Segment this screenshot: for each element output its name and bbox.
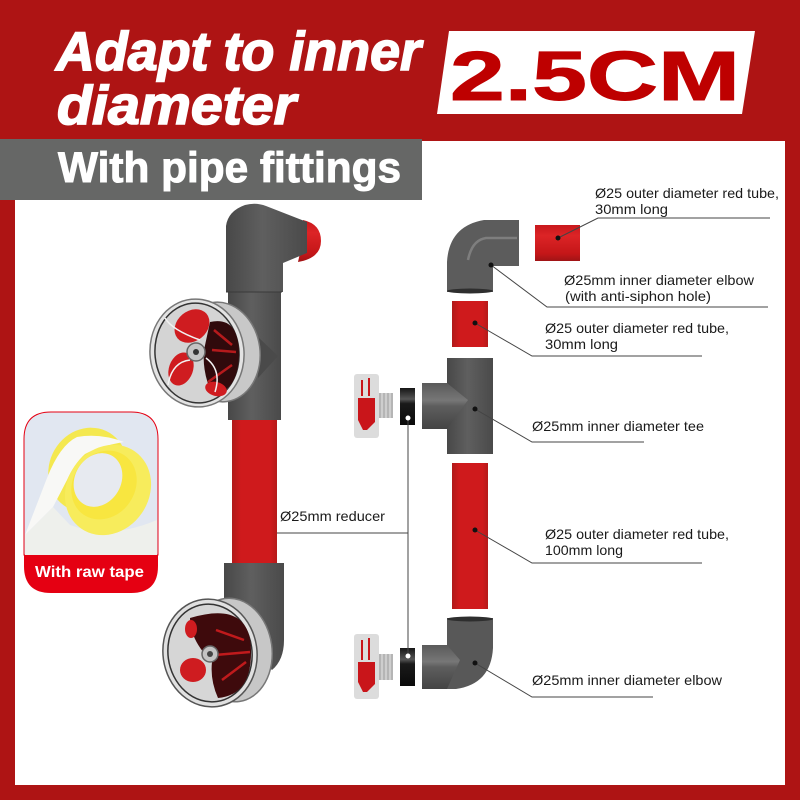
small fan side view top bbox=[354, 374, 393, 438]
exploded bottom elbow bbox=[422, 616, 493, 689]
title: diameter bbox=[57, 74, 299, 136]
label: bottom elbow: Ø25mm inner diameter elbow bbox=[532, 672, 723, 688]
top elbow bbox=[226, 204, 307, 292]
fan hub bbox=[202, 646, 218, 662]
leader: bottom elbow bbox=[472, 660, 653, 697]
fan blades bbox=[168, 302, 216, 350]
top red cap bbox=[298, 220, 321, 262]
tee fitting bbox=[228, 292, 281, 420]
label: top elbow bbox=[564, 272, 755, 304]
label: red tube 100mm bbox=[545, 526, 729, 558]
exploded short red tube horizontal bbox=[535, 225, 580, 261]
label: reducer: Ø25mm reducer bbox=[280, 508, 385, 524]
label: red tube 30mm top: Ø25 outer diameter red tube, bbox=[595, 185, 779, 201]
exploded short red tube vertical bbox=[452, 301, 488, 347]
raw tape card bbox=[24, 412, 169, 593]
tape roll front bbox=[47, 428, 169, 552]
label: red tube 30mm top: 30mm long bbox=[595, 201, 668, 217]
fan hub bbox=[187, 343, 205, 361]
label: red tube 30mm bbox=[545, 320, 729, 352]
leader: tee bbox=[472, 406, 644, 442]
label: red tube 100mm: 100mm long bbox=[545, 542, 623, 558]
title bbox=[54, 20, 424, 136]
tape label bbox=[24, 555, 158, 593]
label: tee: Ø25mm inner diameter tee bbox=[532, 418, 704, 434]
white content panel bbox=[15, 141, 785, 785]
small fan side view bottom bbox=[354, 634, 393, 699]
reducer bottom bbox=[400, 648, 415, 686]
tape strip bbox=[25, 436, 124, 535]
reducer top bbox=[400, 388, 415, 425]
label: top elbow: (with anti-siphon hole) bbox=[565, 288, 711, 304]
label: red tube 100mm: Ø25 outer diameter red tube, bbox=[545, 526, 729, 542]
long red tube bbox=[232, 420, 277, 564]
leader: reducer bbox=[277, 416, 410, 658]
exploded top elbow bbox=[447, 220, 519, 294]
leader: red tube horizontal bbox=[556, 218, 770, 240]
bottom elbow bbox=[224, 563, 284, 670]
title: Adapt to inner bbox=[54, 20, 424, 82]
label: red tube 30mm: Ø25 outer diameter red tube, bbox=[545, 320, 729, 336]
tape shadow bbox=[25, 507, 157, 555]
subtitle banner: With pipe fittings bbox=[58, 144, 401, 192]
exploded tee bbox=[422, 358, 493, 454]
exploded long red tube bbox=[452, 463, 488, 609]
top fan bbox=[145, 294, 267, 412]
size badge: 2.5CM bbox=[450, 37, 740, 115]
leader: short red tube bbox=[472, 320, 702, 356]
leader: long red tube bbox=[472, 528, 702, 563]
raw tape card: With raw tape bbox=[35, 564, 144, 581]
label: red tube 30mm: 30mm long bbox=[545, 336, 618, 352]
assembled pipe bbox=[224, 204, 321, 670]
label: red tube 30mm top bbox=[595, 185, 779, 217]
size badge bbox=[437, 31, 755, 115]
label: top elbow: Ø25mm inner diameter elbow bbox=[564, 272, 755, 288]
subtitle banner bbox=[0, 139, 422, 200]
leader: top elbow bbox=[488, 262, 768, 307]
bottom fan bbox=[156, 593, 279, 713]
tape roll back bbox=[34, 415, 142, 525]
